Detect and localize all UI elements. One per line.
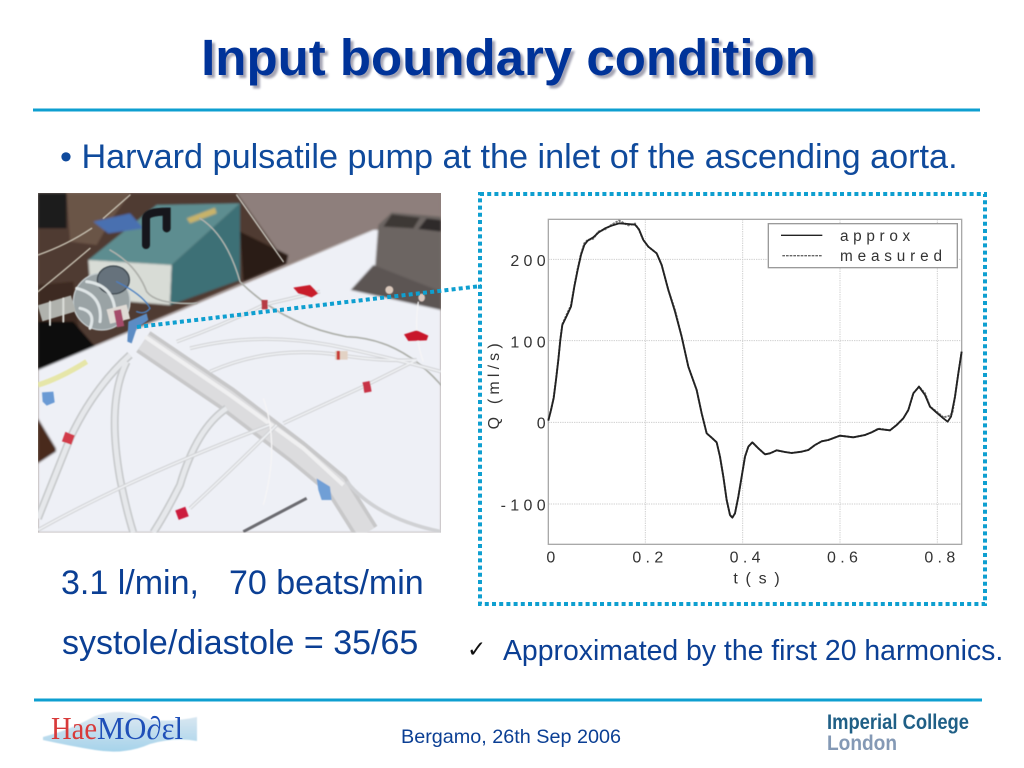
clamps [127, 313, 148, 343]
main tube [143, 342, 367, 533]
flow rate text: 70 beats/min [229, 564, 424, 602]
legend: measured [840, 248, 947, 265]
legend: approx [840, 228, 915, 245]
legend [768, 224, 957, 268]
y axis tick labels: 200 [510, 253, 550, 270]
x axis tick labels: 0.6 [827, 550, 862, 567]
y axis tick labels [501, 253, 550, 515]
title: Input boundary condition [201, 29, 816, 86]
x axis title: t ( s ) [733, 570, 781, 587]
logo: HaeMOdel [43, 710, 197, 752]
bullet text: • Harvard pulsatile pump at the inlet of the ascending aorta. [60, 138, 958, 176]
bottom rule [34, 698, 982, 702]
flow rate text: 3.1 l/min, [61, 564, 199, 602]
check note: ✓ [467, 637, 486, 663]
logo: Imperial College London: London [827, 731, 897, 755]
x axis tick labels: 0.4 [730, 550, 765, 567]
x axis tick labels: 0.2 [632, 550, 668, 567]
y axis tick labels: -100 [501, 498, 550, 515]
systole diastole ratio text: systole/diastole = 35/65 [62, 624, 418, 662]
connector dotted line [137, 286, 481, 327]
top rule [33, 108, 980, 112]
footer date: Bergamo, 26th Sep 2006 [401, 726, 621, 748]
logo: Imperial College London [827, 710, 969, 755]
x axis tick labels: 0 [546, 550, 560, 567]
chart grid [548, 219, 962, 544]
dotted chart frame [480, 194, 985, 604]
y axis tick labels: 100 [510, 334, 550, 351]
plot frame [548, 219, 962, 544]
measured curve [548, 221, 962, 518]
approx curve [548, 223, 962, 518]
flow rate text [61, 564, 424, 602]
check note: Approximated by the first 20 harmonics. [503, 635, 1003, 667]
logo: HaeMOdel: MO∂εl [97, 710, 183, 746]
photo: pump and aortic model [38, 193, 441, 533]
line chart [486, 219, 962, 587]
x axis tick labels: 0.8 [924, 550, 960, 567]
logo: HaeMOdel: Hae [51, 710, 97, 746]
x axis tick labels [546, 550, 960, 567]
y axis tick labels: 0 [537, 416, 550, 433]
y axis title: Q (ml/s) [486, 339, 503, 429]
logo: Imperial College London: Imperial College [827, 710, 969, 734]
